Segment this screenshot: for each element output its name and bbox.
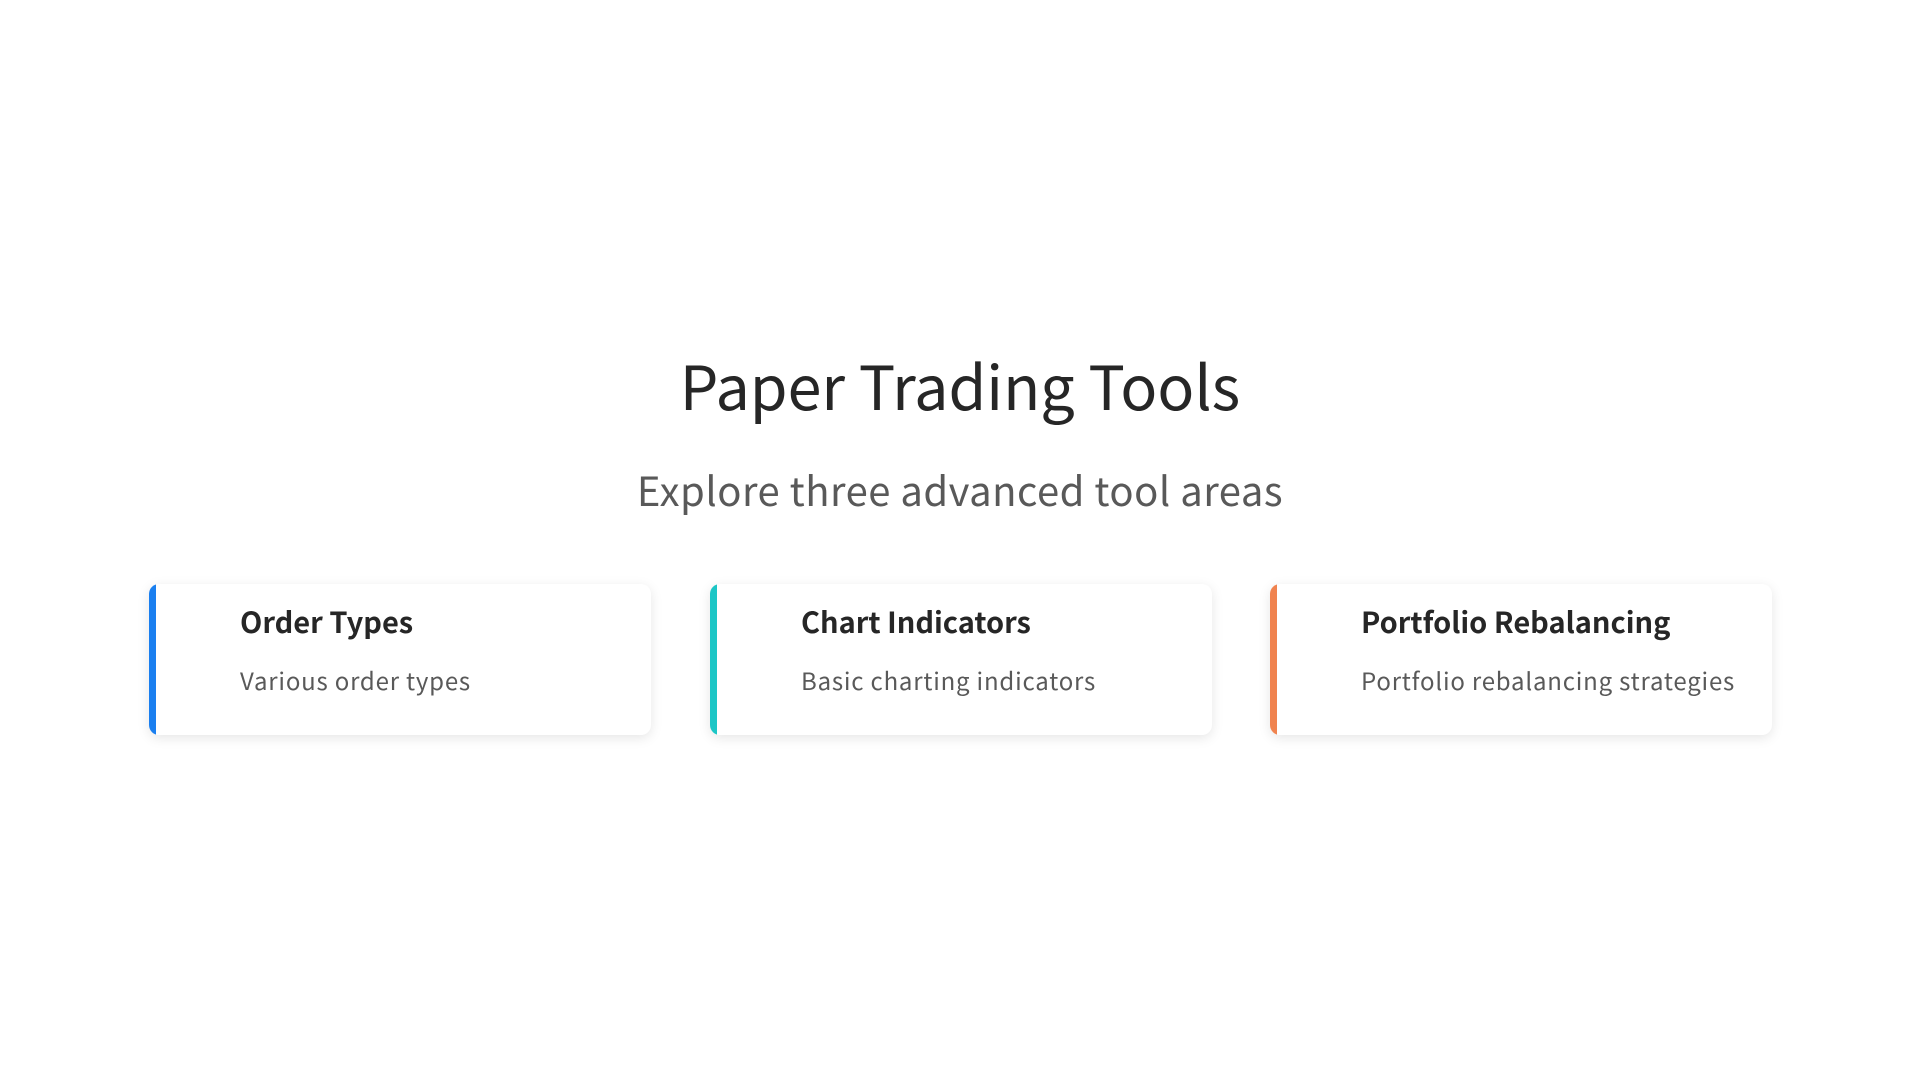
heading: portfolio rebalancing: Portfolio Rebalancing: [1361, 600, 1670, 642]
title: Paper Trading Tools: [680, 339, 1240, 428]
accent bar: blue: [149, 584, 156, 735]
heading: chart indicators: Chart Indicators: [801, 600, 1031, 642]
text: chart indicators description: Basic charting indicators: [801, 662, 1096, 697]
accent bar: orange: [1270, 584, 1277, 735]
subtitle: Explore three advanced tool areas: [637, 460, 1283, 518]
panel: chart indicators: [710, 584, 1212, 735]
text: portfolio rebalancing description: Portfolio rebalancing strategies: [1361, 662, 1735, 697]
accent bar: teal: [710, 584, 717, 735]
panel: portfolio rebalancing: [1270, 584, 1772, 735]
panel: order types: [149, 584, 651, 735]
text: order types description: Various order types: [240, 662, 471, 697]
heading: order types: Order Types: [240, 600, 413, 642]
